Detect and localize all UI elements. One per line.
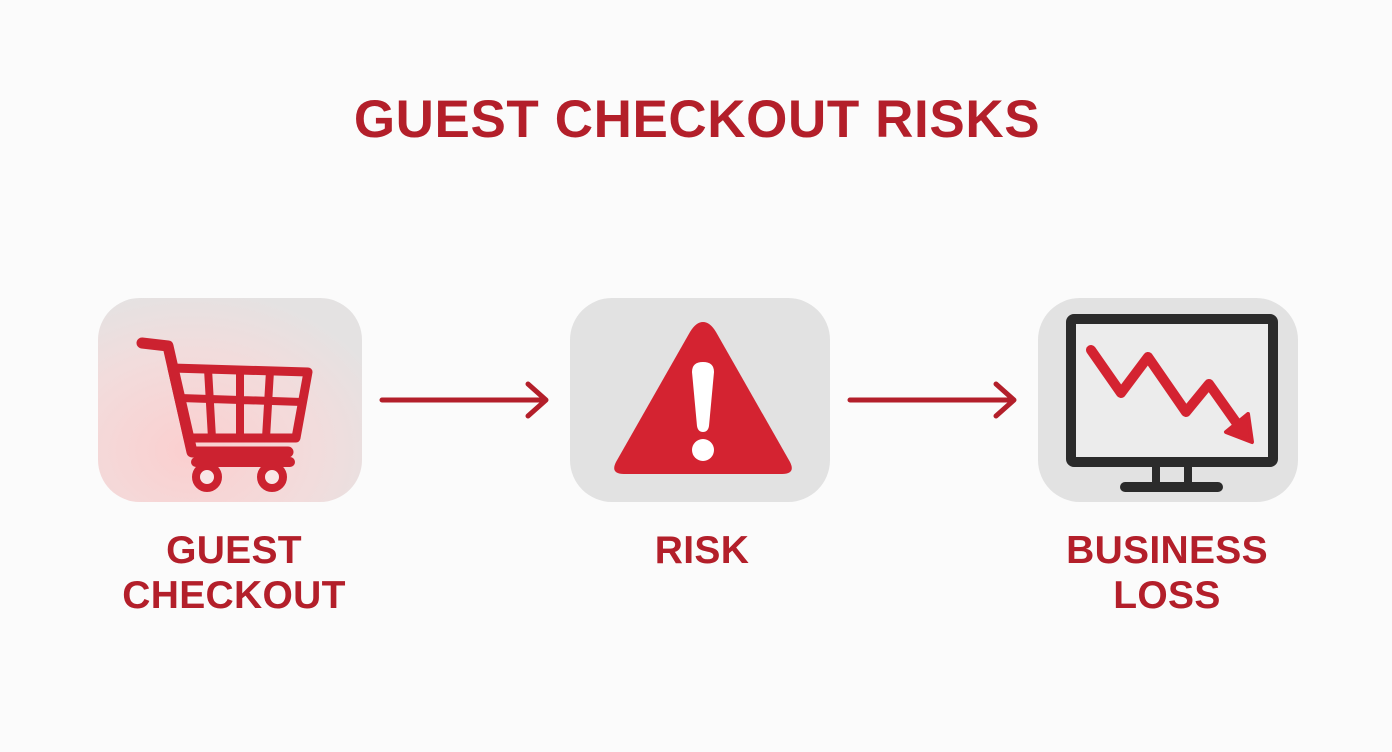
- arrow 1: [382, 384, 546, 416]
- label: risk: RISK: [655, 529, 749, 572]
- icon: warning triangle: [614, 322, 792, 474]
- arrow 2: [850, 384, 1014, 416]
- label: guest checkout: GUEST: [166, 529, 302, 572]
- label: guest checkout: CHECKOUT: [122, 574, 346, 617]
- panel: guest checkout: [98, 298, 362, 502]
- icon: shopping cart: [142, 343, 308, 488]
- icon: monitor with falling chart: [1071, 319, 1273, 487]
- panel: risk: [570, 298, 830, 502]
- label: business loss: BUSINESS: [1066, 529, 1268, 572]
- title: GUEST CHECKOUT RISKS: [354, 90, 1040, 149]
- panel: business loss: [1038, 298, 1298, 502]
- label: business loss: LOSS: [1113, 574, 1221, 617]
